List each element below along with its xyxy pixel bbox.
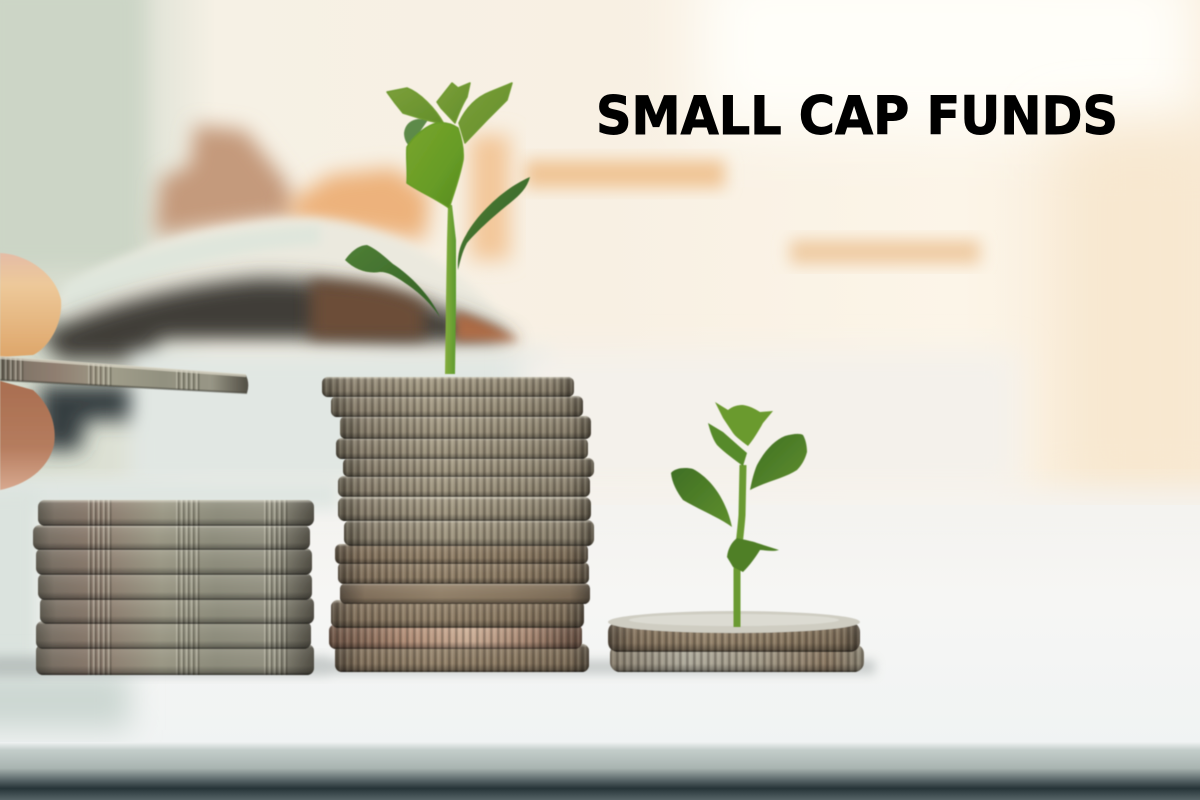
upper finger [0, 253, 61, 357]
leaf: back [404, 119, 428, 146]
blurred book [40, 218, 520, 450]
left coin stack [33, 500, 314, 675]
right coin stack [608, 611, 864, 672]
leaf: central [407, 123, 463, 208]
middle coin stack [322, 377, 594, 672]
leaf: upper middle [437, 83, 470, 123]
leaf: upper right [459, 83, 512, 143]
coin shadows [0, 656, 875, 676]
leaf: top bud [715, 402, 773, 446]
lower finger [0, 381, 55, 490]
leaf: right [750, 434, 807, 490]
leaf: upper left [387, 88, 444, 124]
stem [737, 465, 743, 627]
blurred background [0, 0, 1200, 560]
leaf: lower [727, 538, 779, 572]
leaf: upper left [708, 423, 747, 466]
leaf: left [345, 245, 440, 317]
small plant [671, 402, 807, 627]
large plant [345, 83, 530, 374]
white table surface [0, 480, 1200, 800]
hand holding coin [0, 253, 248, 490]
stem [445, 205, 456, 374]
held coin [0, 356, 248, 394]
title: SMALL CAP FUNDS [596, 86, 1118, 147]
leaf: right [458, 177, 530, 270]
leaf: left [671, 468, 732, 527]
